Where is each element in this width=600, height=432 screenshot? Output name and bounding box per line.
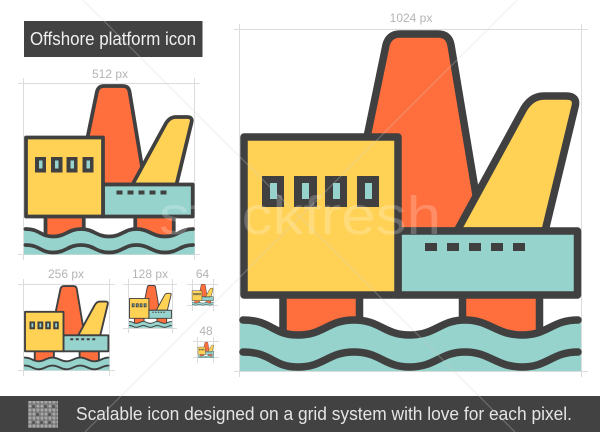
icon: 64 px size sample <box>187 267 218 311</box>
title <box>24 21 202 57</box>
icon: 128 px size sample: 128 px <box>132 267 168 281</box>
icon: pixel grid <box>28 401 58 428</box>
icon: 48 px size sample: 48 <box>199 324 213 338</box>
icon: 256 px size sample: 256 px <box>48 267 84 281</box>
icon: 128 px size sample <box>123 267 177 333</box>
icon: 64 px size sample: 64 <box>196 267 209 281</box>
icon: 512 px size sample: 512 px <box>92 67 128 81</box>
footer bar <box>0 396 600 432</box>
footer text: Scalable icon designed on a grid system with love for each pixel. <box>76 404 572 424</box>
title: Offshore platform icon <box>30 28 196 49</box>
icon: 48 px size sample <box>193 324 219 363</box>
icon: 1024 px size sample: 1024 px <box>390 11 432 25</box>
watermark: stockfresh <box>159 186 441 246</box>
icon: 256 px size sample <box>18 267 115 376</box>
icon: 512 px size sample <box>18 67 200 260</box>
